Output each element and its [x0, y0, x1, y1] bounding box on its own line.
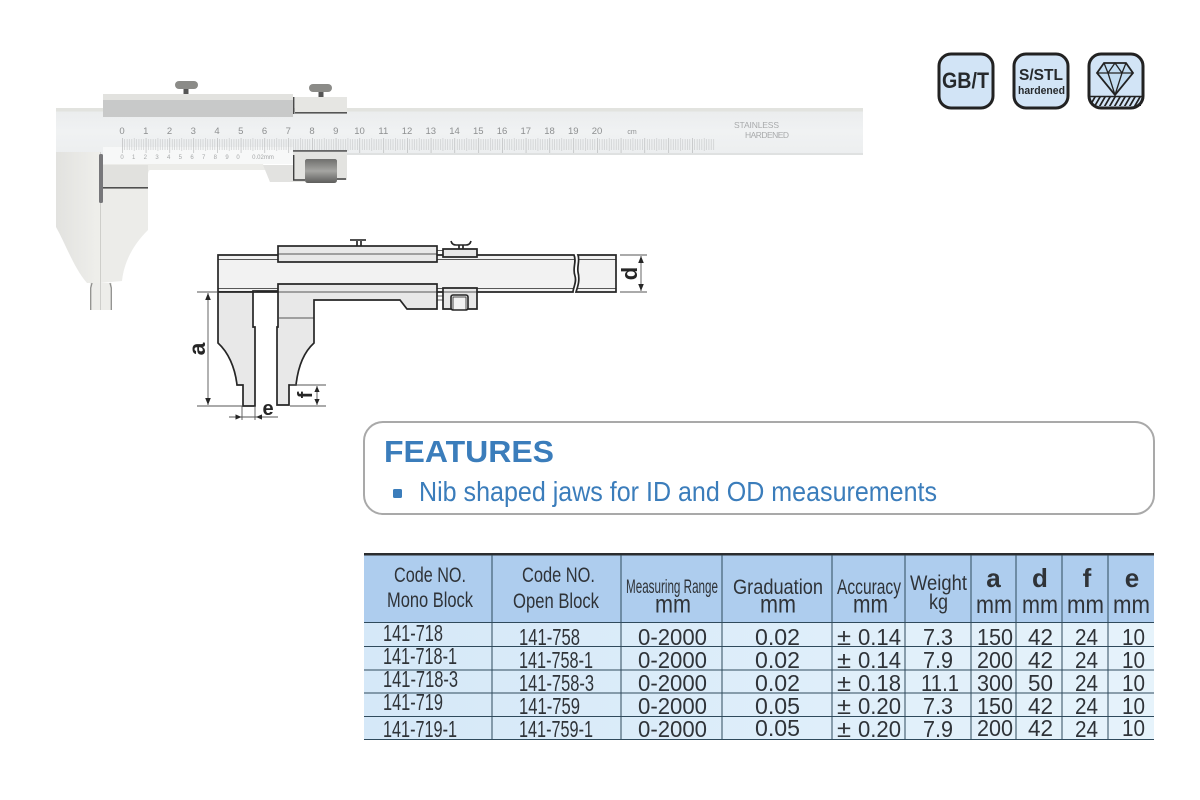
vernier numbers: 0: [236, 155, 240, 161]
table row 141-718-1: 141-718-1: [383, 643, 457, 669]
table row 141-718-1: 7.9: [923, 647, 953, 673]
dimension e: e: [262, 398, 274, 420]
dimension d: [617, 255, 647, 292]
main scale numbers: 1: [143, 126, 148, 137]
main scale numbers: 4: [214, 126, 220, 137]
main scale numbers: 18: [544, 126, 555, 137]
table row 141-718: 0.14: [858, 624, 901, 650]
fixed and sliding jaws: [56, 152, 293, 310]
table row 141-718-1: 0.02: [755, 647, 800, 673]
table header: mm: [976, 591, 1012, 619]
table header: mm: [760, 590, 796, 618]
sliding block with top bar: [103, 94, 347, 117]
vernier numbers: 9: [225, 155, 229, 161]
table row 141-719-1: [383, 715, 1145, 742]
table row 141-718: 0-2000: [638, 624, 707, 650]
table row 141-718-3: 10: [1122, 670, 1145, 696]
table row 141-719: 0-2000: [638, 693, 707, 719]
fixed jaw: [218, 292, 255, 406]
vernier numbers: 2: [144, 155, 148, 161]
table row 141-718-3: ±: [837, 670, 851, 696]
main scale numbers: 15: [473, 126, 484, 137]
beam outline: [218, 255, 616, 292]
table row 141-718-3: 0.18: [858, 670, 901, 696]
table row 141-718: 150: [977, 624, 1013, 650]
vernier numbers: 5: [179, 155, 183, 161]
main scale numbers: 17: [521, 126, 531, 137]
vernier numbers: 3: [155, 155, 159, 161]
main scale numbers: 10: [354, 126, 365, 137]
table row 141-718: 7.3: [923, 624, 953, 650]
table row 141-718-1: 0-2000: [638, 647, 707, 673]
main scale numbers: [119, 126, 637, 137]
table row 141-719-1: 0.05: [755, 715, 800, 741]
table row 141-719-1: 42: [1028, 715, 1053, 741]
table header: Measuring Range: [626, 577, 718, 598]
badge: GB/T standard: GB/T: [942, 68, 989, 93]
table header: Mono Block: [387, 589, 473, 612]
table row 141-718-1: ±: [837, 647, 851, 673]
dimension a: [184, 292, 242, 406]
table row 141-719: [383, 689, 1145, 719]
table header: mm: [655, 590, 691, 618]
main scale numbers: 6: [262, 126, 267, 137]
top slider bar: [278, 240, 437, 262]
badge: S/STL hardened: [1014, 54, 1068, 108]
table header: Accuracy: [837, 576, 901, 599]
feature bullet item: Nib shaped jaws for ID and OD measurements: [419, 476, 937, 507]
vernier numbers: 0.02mm: [252, 155, 274, 161]
table row 141-718-3: 141-758-3: [519, 670, 594, 696]
table row 141-719: 7.3: [923, 693, 953, 719]
table header: mm: [1067, 591, 1104, 619]
table rules: [364, 555, 1154, 740]
features heading: FEATURES: [384, 434, 554, 469]
main scale numbers: 7: [286, 126, 291, 137]
badge: GB/T standard: [939, 54, 993, 108]
dimension d: d: [617, 267, 642, 280]
main scale numbers: 5: [238, 126, 243, 137]
table row 141-718: 24: [1075, 624, 1098, 650]
table row 141-719-1: 141-759-1: [519, 716, 593, 742]
main scale numbers: 14: [449, 126, 460, 137]
table header: mm: [1113, 591, 1150, 619]
table row 141-718-3: 0-2000: [638, 670, 707, 696]
table row 141-718-3: 50: [1028, 670, 1053, 696]
table row 141-718: 42: [1028, 624, 1053, 650]
main scale numbers: 3: [191, 126, 196, 137]
vernier window: [103, 147, 293, 164]
table row 141-718-1: 200: [977, 647, 1013, 673]
table row 141-718: ±: [837, 624, 851, 650]
table header: f: [1083, 563, 1092, 593]
technical line drawing with dimensions: [184, 240, 647, 420]
caliper beam: [56, 108, 863, 155]
main scale numbers: cm: [627, 129, 637, 136]
vernier numbers: 6: [190, 155, 194, 161]
table row 141-718-3: 11.1: [921, 670, 959, 696]
vernier numbers: [120, 155, 274, 161]
main scale numbers: 19: [568, 126, 579, 137]
table backgrounds: [364, 553, 1154, 740]
table row 141-719: 10: [1122, 693, 1145, 719]
table row 141-719: 141-719: [383, 689, 443, 715]
vernier numbers: 8: [214, 155, 218, 161]
table row 141-719-1: 200: [977, 715, 1013, 741]
table row 141-719: 0.20: [858, 693, 901, 719]
clamp block: [437, 241, 477, 310]
table row 141-719-1: 7.9: [923, 716, 953, 742]
badge: S/STL hardened: hardened: [1018, 85, 1065, 97]
engraved text: [734, 120, 789, 140]
badges: [939, 54, 1143, 108]
vernier numbers: 1: [132, 155, 136, 161]
thumb screws: [175, 81, 332, 97]
table row 141-719-1: 0-2000: [638, 716, 707, 742]
main scale numbers: 8: [309, 126, 315, 137]
table header: [387, 563, 1150, 619]
main scale numbers: 12: [402, 126, 412, 137]
dimension f: f: [295, 391, 317, 398]
table row 141-719: 0.05: [755, 693, 800, 719]
table header: d: [1032, 563, 1048, 593]
badge: diamond hardness: [1089, 54, 1143, 108]
table header: a: [986, 563, 1001, 593]
dimension f: [290, 385, 326, 406]
main scale ticks: [122, 138, 715, 153]
vernier numbers: 0: [120, 155, 124, 161]
table row 141-719-1: 10: [1122, 715, 1145, 741]
table row 141-718-3: 141-718-3: [383, 666, 458, 692]
table row 141-718-3: 0.02: [755, 670, 800, 696]
table row 141-718: 0.02: [755, 624, 800, 650]
main scale numbers: 11: [378, 126, 388, 137]
vernier numbers: 4: [167, 155, 171, 161]
table row 141-719-1: 141-719-1: [383, 716, 457, 742]
table header: Code NO.: [394, 564, 466, 587]
table row 141-719: 141-759: [519, 693, 580, 719]
table header: Open Block: [513, 590, 599, 613]
table row 141-719: 42: [1028, 693, 1053, 719]
table row 141-718-1: 42: [1028, 647, 1053, 673]
dimension e: [229, 398, 278, 420]
table row 141-718: 141-718: [383, 620, 443, 646]
table row 141-718-1: 141-758-1: [519, 647, 593, 673]
photo: stainless vernier caliper: [56, 81, 863, 310]
table row 141-719: ±: [837, 693, 851, 719]
main scale numbers: 16: [497, 126, 507, 137]
table header: e: [1125, 563, 1139, 593]
table row 141-718-3: 24: [1075, 670, 1098, 696]
dimension a: a: [184, 342, 210, 355]
table row 141-719: 150: [977, 693, 1013, 719]
table row 141-719: 24: [1075, 693, 1098, 719]
table header: mm: [1022, 591, 1058, 619]
engraved text: HARDENED: [745, 130, 789, 140]
badge: S/STL hardened: S/STL: [1019, 67, 1063, 84]
main scale numbers: 0: [119, 126, 125, 137]
table row 141-718-1: 24: [1075, 647, 1098, 673]
engraved text: STAINLESS: [734, 120, 779, 130]
table row 141-718-1: 0.14: [858, 647, 901, 673]
specification table: [364, 553, 1154, 742]
table row 141-719-1: 0.20: [858, 716, 901, 742]
table header: mm: [853, 590, 888, 618]
panel: features: [364, 422, 1154, 514]
sliding jaw: [253, 284, 437, 405]
table row 141-718-3: [383, 666, 1145, 696]
main scale numbers: 20: [592, 126, 602, 137]
table row 141-719-1: ±: [837, 716, 851, 742]
slider clamp with roller: [293, 150, 347, 183]
vernier numbers: 7: [202, 155, 206, 161]
table header: Graduation: [733, 576, 823, 599]
table header: Weight: [910, 572, 967, 595]
table header: Code NO.: [522, 564, 595, 587]
table header: kg: [929, 591, 948, 614]
main scale numbers: 9: [333, 126, 338, 137]
table row 141-718-1: 10: [1122, 647, 1145, 673]
table row 141-718-3: 300: [977, 670, 1013, 696]
table row 141-718: 10: [1122, 624, 1145, 650]
main scale numbers: 13: [426, 126, 436, 137]
table row 141-719-1: 24: [1075, 716, 1098, 742]
table row 141-718: 141-758: [519, 624, 580, 650]
table row 141-718: [383, 620, 1145, 650]
main scale numbers: 2: [167, 126, 172, 137]
table row 141-718-1: [383, 643, 1145, 673]
